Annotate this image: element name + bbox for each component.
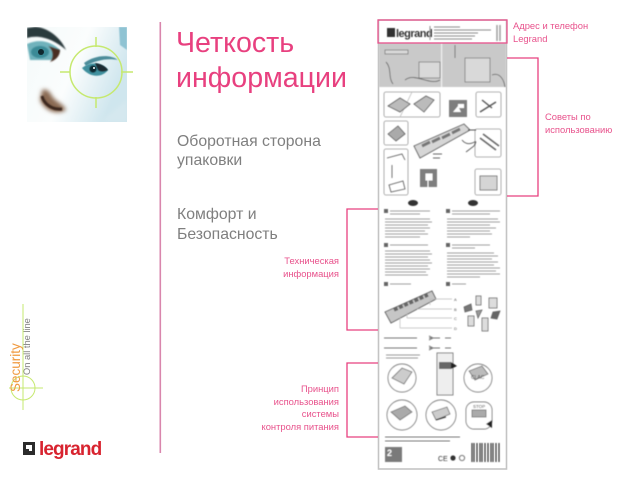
illustration: usage steps: STOP xyxy=(473,404,485,409)
label: technical information: Техническая xyxy=(284,255,339,266)
logo: legrand: legrand xyxy=(39,439,102,460)
formulas xyxy=(384,336,451,358)
label: principle of the power control system: контроля питания xyxy=(262,421,339,432)
label: usage tips: использованию xyxy=(545,124,612,135)
callout bracket: usage tips xyxy=(507,58,538,196)
illustration: strip with labels A to D: B xyxy=(454,307,457,312)
callout bracket: operating principle xyxy=(347,363,378,437)
title: Четкость xyxy=(176,27,294,59)
illustration: power strip xyxy=(414,124,476,158)
text block: reverse side of packaging: упаковки xyxy=(177,152,242,169)
text block: comfort and safety: Комфорт и xyxy=(177,206,257,223)
text block: reverse side of packaging: Оборотная сторона xyxy=(177,133,321,150)
icon: target sight xyxy=(60,37,133,108)
label: usage tips: Советы по xyxy=(545,111,591,122)
slogan: Security on all the line: Security xyxy=(8,343,23,392)
callout bracket: technical information xyxy=(347,209,378,330)
vertical divider line xyxy=(160,22,161,453)
illustration: usage steps xyxy=(387,353,492,430)
warning text xyxy=(385,437,460,441)
footer badge xyxy=(385,447,402,462)
illustration: strip with labels A to D: D xyxy=(454,326,457,331)
package header: legrand xyxy=(396,28,432,40)
package header xyxy=(387,25,500,41)
text block: comfort and safety: Безопасность xyxy=(177,226,278,243)
label: principle of the power control system: использования xyxy=(274,396,339,407)
footer badge: 2 xyxy=(387,448,392,458)
label: principle of the power control system: Принцип xyxy=(301,383,339,394)
illustration: strip with labels A to D: A xyxy=(454,297,457,302)
illustration grid: instructions xyxy=(384,92,501,195)
language badges xyxy=(408,200,478,206)
photo band: usage tips xyxy=(379,43,506,87)
illustration: usage steps: CLAC xyxy=(471,375,485,381)
barcode xyxy=(472,443,499,462)
label: technical information: информация xyxy=(283,268,339,279)
package back side xyxy=(378,20,506,469)
illustration: appliances xyxy=(464,296,500,331)
illustration: strip with labels A to D xyxy=(385,291,457,331)
photo: woman's face with target xyxy=(27,27,133,122)
technical text columns xyxy=(384,209,500,286)
slogan: Security on all the line: On all the line xyxy=(22,318,32,375)
illustration: strip with labels A to D: C xyxy=(454,316,457,321)
callout box: address and phone xyxy=(378,20,507,43)
label: address and phone: Legrand xyxy=(513,33,547,44)
certification marks: CE xyxy=(438,456,448,463)
icon: grey plug tile xyxy=(420,169,437,187)
slogan: Security on all the line xyxy=(8,304,43,410)
icon: grey tips tile xyxy=(449,100,467,117)
title: информации xyxy=(176,62,347,94)
label: principle of the power control system: системы xyxy=(302,408,339,419)
label: address and phone: Адрес и телефон xyxy=(513,20,588,31)
certification marks xyxy=(438,455,465,463)
